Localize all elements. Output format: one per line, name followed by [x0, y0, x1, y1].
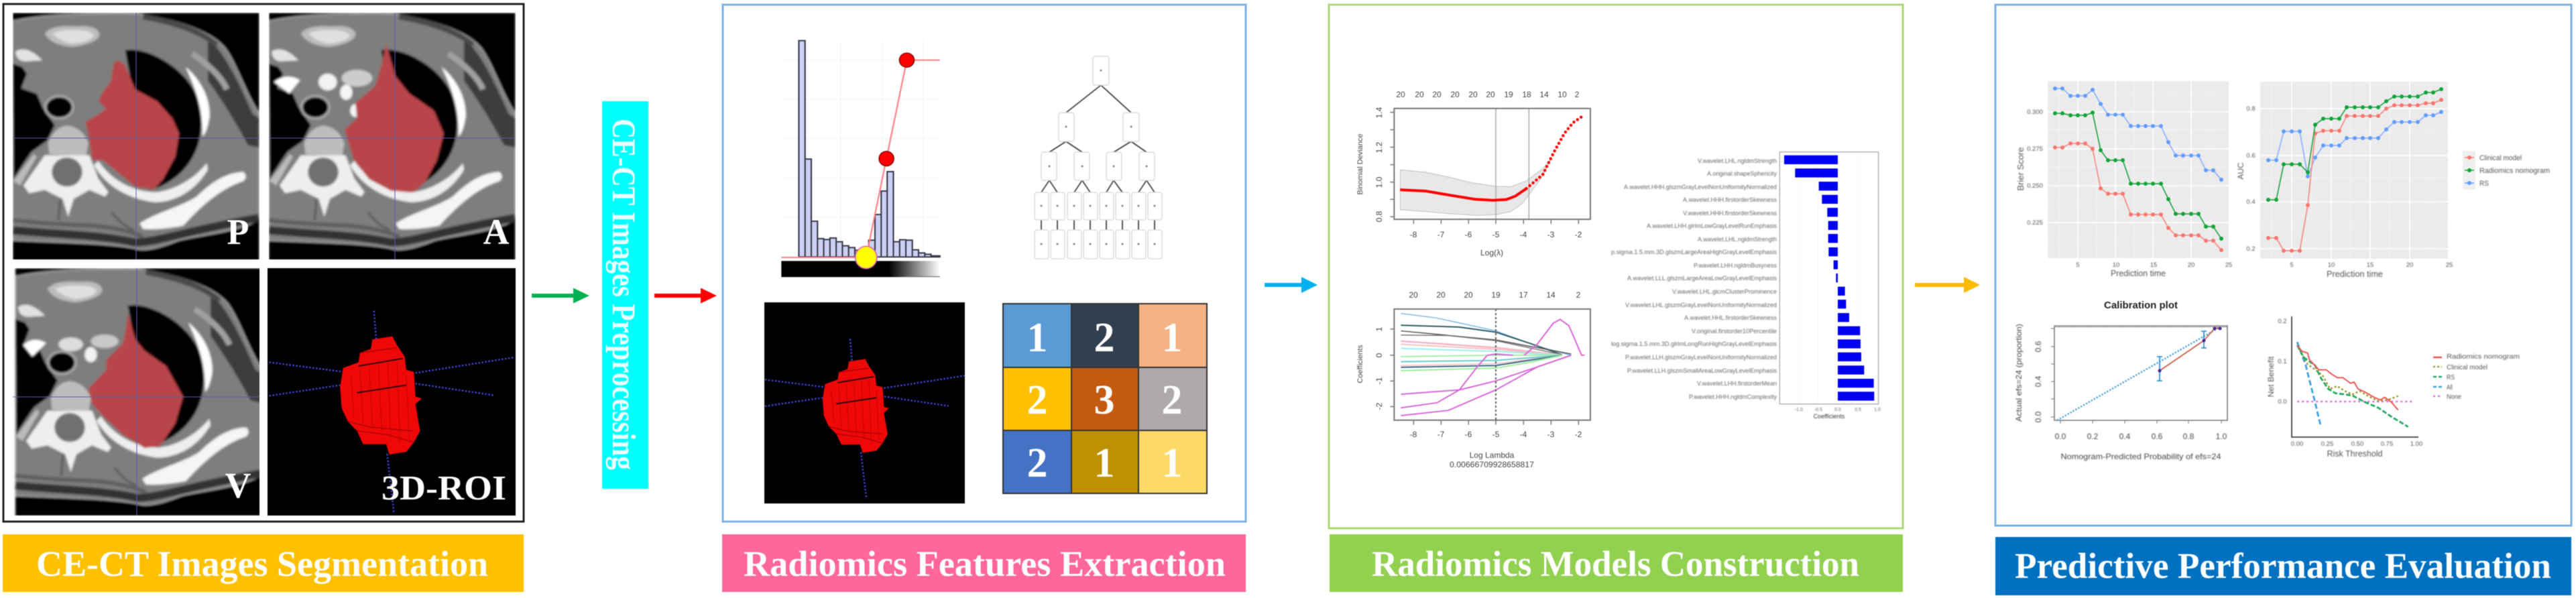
chart: calibration plot: 0.0: [2055, 432, 2066, 441]
chart: feature coefficients bar chart: P.wavelet.LLH.glszmSmallAreaLowGrayLevelEmphasis: [1627, 367, 1777, 375]
chart: feature coefficients bar chart: A.wavelet.HHH.firstorderSkewness: [1683, 196, 1777, 204]
heading: Radiomics Models Construction: [1330, 534, 1903, 592]
chart: AUC: 20: [2406, 261, 2413, 269]
matrix: colored numeric grid: 3: [1094, 377, 1114, 423]
image: arterial CT slice: A: [483, 212, 510, 252]
chart: feature coefficients bar chart: A.wavelet.LHL.ngldmStrength: [1698, 236, 1777, 243]
chart: binomial deviance: 2: [1575, 90, 1580, 99]
label: CE-CT Images Preprocessing: [602, 101, 648, 489]
chart: Brier score: 10: [2113, 261, 2119, 269]
chart: decision curve analysis: 1.00: [2410, 440, 2422, 448]
chart: feature coefficients bar chart: -0.5: [1814, 408, 1822, 412]
image: venous CT slice: [13, 268, 262, 516]
chart: feature coefficients bar chart: log.sigma.1.5.mm.3D.glrlmLongRunHighGrayLevelEmphasis: [1611, 341, 1777, 348]
chart: calibration plot: 0.4: [2119, 432, 2131, 441]
chart: feature coefficients bar chart: 0.5: [1855, 408, 1861, 412]
chart: calibration plot: 0.0: [2034, 411, 2043, 422]
chart: decision curve analysis: 0.25: [2321, 440, 2333, 448]
chart: decision curve analysis: 0.75: [2381, 440, 2393, 448]
heading: CE-CT Images Segmentation: [3, 534, 524, 592]
chart: calibration plot: [2014, 300, 2227, 461]
heading: Radiomics Models Construction: Radiomics Models Construction: [1372, 544, 1859, 584]
arrow: red: [654, 288, 717, 303]
panel: radiomics models construction: [1329, 5, 1903, 528]
chart: decision curve analysis: 0.0: [2278, 398, 2287, 406]
legend: decision curves: None: [2447, 393, 2461, 401]
chart: LASSO coefficient paths: 20: [1409, 290, 1418, 300]
chart: LASSO coefficient paths: -5: [1492, 430, 1500, 439]
chart: binomial deviance: Binomial Deviance: [1356, 133, 1364, 195]
chart: AUC: 0.2: [2246, 245, 2256, 253]
chart: LASSO coefficient paths: -8: [1410, 430, 1417, 439]
chart: LASSO coefficient paths: -4: [1520, 430, 1527, 439]
heading: Radiomics Features Extraction: [722, 534, 1246, 592]
chart: Brier score: 0.300: [2027, 109, 2043, 116]
chart: binomial deviance: -8: [1410, 230, 1417, 239]
chart: binomial deviance: -2: [1575, 230, 1582, 239]
chart: feature coefficients bar chart: A.wavelet.LLL.glszmLargeAreaLowGrayLevelEmphasis: [1627, 275, 1777, 282]
matrix: colored numeric grid: 2: [1094, 315, 1114, 361]
chart: binomial deviance: -4: [1520, 230, 1527, 239]
chart: LASSO coefficient paths: 17: [1519, 290, 1528, 300]
chart: Brier score: 0.250: [2027, 182, 2043, 190]
chart: binomial deviance: -7: [1438, 230, 1445, 239]
chart: LASSO coefficient paths: -6: [1465, 430, 1472, 439]
legend: time-dependent charts: Radiomics nomogram: [2479, 167, 2550, 175]
chart: LASSO coefficient paths: -2: [1575, 430, 1582, 439]
matrix: colored numeric grid: 2: [1161, 377, 1183, 423]
chart: feature coefficients bar chart: V.original.firstorder10Percentile: [1692, 328, 1777, 335]
image: portal CT slice: P: [227, 212, 249, 252]
chart: decision tree: [1035, 56, 1162, 259]
chart: decision curve analysis: 0.50: [2351, 440, 2363, 448]
chart: binomial deviance: 20: [1396, 90, 1405, 99]
panel: CE-CT images segmentation: [3, 4, 524, 522]
chart: feature coefficients bar chart: P.wavelet.LLH.glszmGrayLevelNonUniformityNormalized: [1625, 354, 1777, 361]
chart: feature coefficients bar chart: [1611, 152, 1881, 420]
image: 3D ROI: [764, 302, 965, 503]
chart: binomial deviance: -6: [1465, 230, 1472, 239]
chart: calibration plot: 0.6: [2152, 432, 2163, 441]
matrix: colored numeric grid: 2: [1027, 440, 1047, 486]
chart: binomial deviance: 20: [1432, 90, 1442, 99]
chart: decision curve analysis: [2266, 316, 2422, 459]
chart: calibration plot: 1.0: [2216, 432, 2227, 441]
chart: binomial deviance: 10: [1558, 90, 1567, 99]
chart: feature coefficients bar chart: P.wavelet.LHH.ngldmBusyness: [1694, 262, 1777, 270]
chart: calibration plot: 0.8: [2183, 432, 2194, 441]
matrix: colored numeric grid: 1: [1027, 315, 1047, 361]
arrow: yellow: [1915, 277, 1980, 293]
chart: feature coefficients bar chart: 0.0: [1834, 408, 1841, 412]
chart: AUC: 25: [2446, 261, 2453, 269]
chart: LASSO coefficient paths: [1356, 290, 1590, 469]
chart: binomial deviance: 19: [1504, 90, 1513, 99]
chart: binomial deviance: 20: [1468, 90, 1478, 99]
chart: LASSO coefficient paths: 14: [1546, 290, 1556, 300]
chart: AUC: [2236, 82, 2453, 279]
chart: feature coefficients bar chart: Coefficients: [1814, 413, 1845, 420]
chart: binomial deviance: 14: [1539, 90, 1549, 99]
legend: time-dependent charts: RS: [2479, 180, 2489, 188]
chart: Brier score: 5: [2076, 261, 2080, 269]
chart: LASSO coefficient paths: 19: [1491, 290, 1501, 300]
chart: LASSO coefficient paths: 20: [1436, 290, 1446, 300]
chart: binomial deviance: 20: [1415, 90, 1424, 99]
chart: binomial deviance: [1356, 90, 1590, 257]
matrix: colored numeric grid: 2: [1027, 377, 1047, 423]
chart: binomial deviance: 1.0: [1374, 176, 1384, 188]
legend: decision curves: Radiomics nomogram: [2447, 353, 2520, 361]
chart: Brier score: Brier Score: [2016, 147, 2026, 190]
chart: LASSO coefficient paths: Log Lambda: [1470, 451, 1515, 460]
chart: feature coefficients bar chart: V.wavelet.LHL.ngldmStrength: [1698, 158, 1777, 165]
chart: Brier score: 25: [2225, 261, 2232, 269]
chart: feature coefficients bar chart: p.sigma.1.5.mm.3D.glszmLargeAreaHighGrayLevelEmphasis: [1611, 249, 1777, 256]
chart: Brier score: [2016, 81, 2232, 278]
image: portal CT slice: [13, 13, 259, 261]
chart: binomial deviance: 0.8: [1374, 211, 1384, 222]
chart: calibration plot: Nomogram-Predicted Probability of efs=24: [2061, 452, 2221, 461]
chart: LASSO coefficient paths: -3: [1547, 430, 1555, 439]
chart: feature coefficients bar chart: A.wavelet.HHH.glszmGrayLevelNonUniformityNormalized: [1624, 184, 1777, 191]
image: 3D region of interest: [268, 268, 516, 516]
chart: binomial deviance: 1.4: [1374, 107, 1384, 118]
chart: LASSO coefficient paths: 1: [1374, 326, 1384, 331]
chart: AUC: 0.8: [2246, 105, 2256, 113]
chart: LASSO coefficient paths: 0: [1374, 353, 1384, 357]
matrix: colored numeric grid: 1: [1161, 440, 1183, 486]
heading: CE-CT Images Segmentation: CE-CT Images Segmentation: [36, 544, 488, 584]
chart: feature coefficients bar chart: A.original.shapeSphericity: [1707, 170, 1777, 178]
chart title: Calibration plot: Calibration plot: [2104, 300, 2178, 311]
panel: predictive performance evaluation: [1995, 5, 2571, 526]
arrow: blue: [1265, 277, 1318, 293]
legend: time-dependent charts: Clinical model: [2479, 154, 2522, 162]
chart: feature coefficients bar chart: A.wavelet.LHH.glrlmLowGrayLevelRunEmphasis: [1647, 223, 1777, 230]
chart: calibration plot: 0.4: [2034, 375, 2043, 387]
chart: LASSO coefficient paths: 2: [1576, 290, 1581, 300]
label: CE-CT Images Preprocessing: CE-CT Images Preprocessing: [605, 119, 643, 470]
chart: Brier score: 0.225: [2027, 219, 2043, 227]
chart: LASSO coefficient paths: -1: [1374, 377, 1384, 384]
chart: feature coefficients bar chart: V.wavelet.LHL.glszmGrayLevelNonUniformityNormalized: [1625, 302, 1777, 309]
image: 3D region of interest: 3D-ROI: [382, 469, 506, 507]
image: venous CT slice: V: [225, 465, 251, 505]
chart: LASSO coefficient paths: -2: [1374, 402, 1384, 410]
chart: Brier score: 20: [2188, 261, 2194, 269]
chart: decision curve analysis: Net Benefit: [2266, 356, 2276, 397]
chart: AUC: 5: [2290, 261, 2294, 269]
chart: decision curve analysis: Risk Threshold: [2327, 449, 2383, 459]
chart: feature coefficients bar chart: A.wavelet.HHL.firstorderSkewness: [1684, 314, 1777, 322]
chart: binomial deviance: Log(λ): [1480, 248, 1503, 257]
chart: binomial deviance: 20: [1486, 90, 1495, 99]
heading: Predictive Performance Evaluation: [1995, 537, 2571, 595]
chart: feature coefficients bar chart: V.wavelet.LHH.firstorderMean: [1697, 380, 1777, 387]
legend: decision curves: All: [2447, 383, 2453, 392]
arrow: green: [532, 288, 589, 303]
chart: Brier score: 15: [2150, 261, 2157, 269]
chart: AUC: 15: [2367, 261, 2374, 269]
matrix: colored numeric grid: 1: [1161, 315, 1183, 361]
chart: feature coefficients bar chart: V.wavelet.HHH.firstorderSkewness: [1683, 210, 1777, 217]
chart: AUC: Prediction time: [2327, 270, 2383, 279]
legend: decision curves: Clinical model: [2447, 363, 2487, 371]
chart: calibration plot: 0.6: [2034, 341, 2043, 352]
chart: feature coefficients bar chart: 1.0: [1874, 408, 1881, 412]
chart: LASSO coefficient paths: 0.00666709928658817: [1450, 460, 1534, 469]
matrix: colored numeric grid: 1: [1094, 440, 1114, 486]
legend: time-dependent charts: [2463, 151, 2550, 190]
chart: LASSO coefficient paths: Coefficients: [1356, 345, 1364, 383]
heading: Radiomics Features Extraction: Radiomics Features Extraction: [744, 544, 1226, 584]
chart: AUC: 0.4: [2246, 198, 2256, 206]
matrix: colored numeric grid: [1003, 304, 1207, 493]
chart: feature coefficients bar chart: V.wavelet.LHL.glcmClusterProminence: [1672, 288, 1777, 296]
chart: LASSO coefficient paths: -7: [1438, 430, 1445, 439]
chart: feature coefficients bar chart: P.wavelet.HHH.ngldmComplexity: [1689, 394, 1777, 401]
legend: decision curves: [2433, 353, 2520, 401]
chart: feature coefficients bar chart: -1.0: [1795, 408, 1803, 412]
panel: radiomics features extraction: [723, 5, 1246, 522]
chart: binomial deviance: 18: [1522, 90, 1531, 99]
chart: calibration plot: 0.2: [2087, 432, 2099, 441]
chart: histogram with tone curve: [781, 40, 940, 277]
chart: AUC: 10: [2328, 261, 2335, 269]
chart: Brier score: 0.275: [2027, 145, 2043, 153]
chart: AUC: 0.6: [2246, 152, 2256, 160]
chart: binomial deviance: -3: [1547, 230, 1555, 239]
chart: AUC: AUC: [2236, 162, 2245, 180]
heading: Predictive Performance Evaluation: Predictive Performance Evaluation: [2015, 546, 2551, 586]
chart: calibration plot: Actual efs=24 (proportion): [2014, 324, 2024, 422]
image: arterial CT slice: [269, 13, 516, 261]
chart: decision curve analysis: 0.2: [2278, 318, 2287, 325]
chart: decision curve analysis: 0.00: [2291, 440, 2303, 448]
chart: Brier score: Prediction time: [2111, 269, 2166, 278]
chart: binomial deviance: -5: [1492, 230, 1500, 239]
chart: binomial deviance: 1.2: [1374, 141, 1384, 153]
chart: decision curve analysis: 0.1: [2278, 358, 2287, 365]
legend: decision curves: RS: [2447, 373, 2455, 381]
chart: binomial deviance: 20: [1450, 90, 1460, 99]
chart: LASSO coefficient paths: 20: [1464, 290, 1473, 300]
